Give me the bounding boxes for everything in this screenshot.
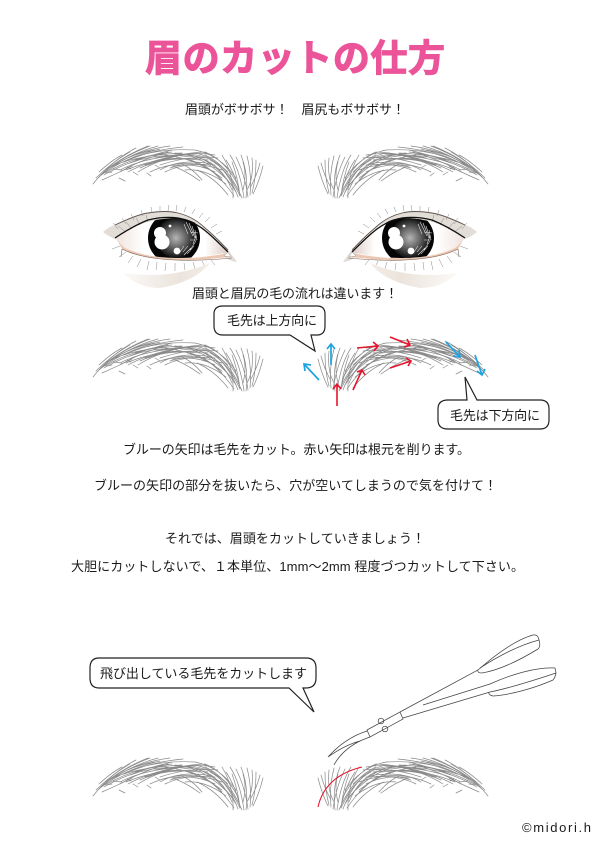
callout: hair tips downward: 毛先は下方向に [450,408,540,423]
heading: hair flow differs: 眉頭と眉尻の毛の流れは違います！ [192,286,398,301]
arrows: red, trim roots [333,337,411,406]
instruction text: arrows: ブルーの矢印は毛先をカット。赤い矢印は根元を削ります。 [123,442,470,457]
callout: hair tips upward [214,306,325,351]
credit: ©midori.h [522,820,591,835]
instruction text: warning: ブルーの矢印の部分を抜いたら、穴が空いてしまうので気を付けて！ [94,478,497,493]
eyebrow: bottom left [93,758,263,810]
eyebrow: bottom right [318,758,488,810]
cut line: red arc [318,767,362,807]
intro text: 眉頭がボサボサ！ 眉尻もボサボサ！ [185,102,405,117]
title: 眉のカットの仕方 [145,38,445,79]
eyebrow: middle left [93,339,263,391]
illustration: left eye [103,205,237,288]
callout: cut protruding tips: 飛び出している毛先をカットします [100,666,307,681]
instruction text: cut amount: 大胆にカットしないで、１本単位、1mm〜2mm 程度づつカットして下さい。 [71,559,524,574]
illustration: right eye [343,205,477,288]
callout: cut protruding tips [90,658,316,712]
arrows: blue, cut tips [304,342,485,380]
callout: hair tips downward [438,377,549,429]
instruction text: next step: それでは、眉頭をカットしていきましょう！ [165,531,425,546]
illustration: scissors [328,635,556,765]
eyebrow: top left [93,146,263,198]
eyebrow: top right [318,146,488,198]
eyebrow: middle right [318,339,488,391]
callout: hair tips upward: 毛先は上方向に [227,313,317,328]
